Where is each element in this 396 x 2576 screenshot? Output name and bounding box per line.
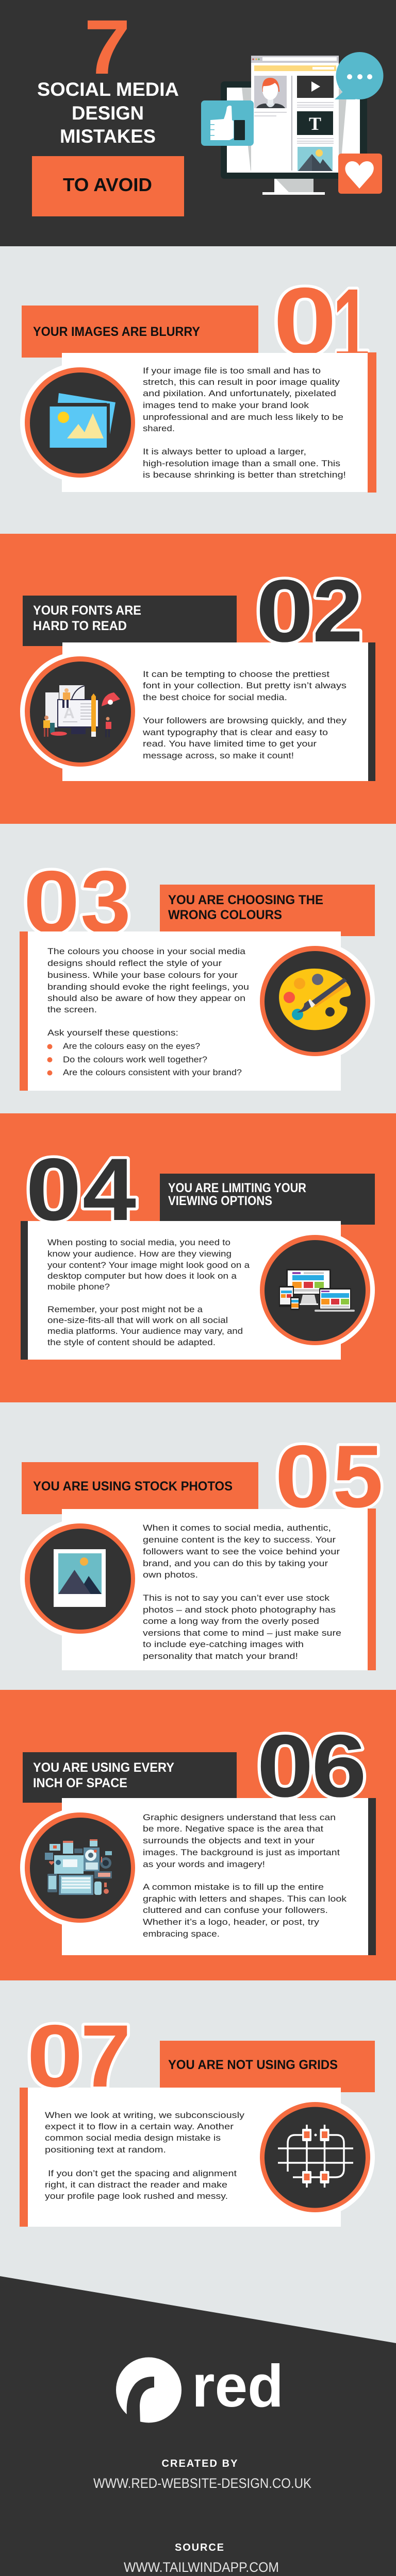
body text: font in your collection. But pretty isn’t always <box>143 681 346 690</box>
icon: speech bubble <box>335 52 384 99</box>
body text <box>143 1523 341 1661</box>
body text: images. The background is just as important <box>143 1848 340 1857</box>
body text: photos – and stock photo photography has <box>143 1605 336 1615</box>
body text: to include eye-catching images with <box>143 1640 304 1649</box>
heading bar: YOU ARE LIMITING YOUR <box>168 1181 306 1195</box>
heading bar: VIEWING OPTIONS <box>168 1194 272 1208</box>
body text: This is not to say you can’t ever use stock <box>143 1594 330 1603</box>
body text: desktop computer but how does it look on a <box>47 1272 237 1281</box>
number 05: 0 <box>275 1427 331 1526</box>
icon: cluttered devices <box>20 1808 140 1927</box>
body text <box>143 366 346 480</box>
bullet list: Are the colours consistent with your brand? <box>63 1068 242 1077</box>
panel: mistake 01 <box>0 246 396 534</box>
panel: header <box>0 0 396 246</box>
body text: surrounds the objects and text in your <box>143 1836 315 1845</box>
heading bar: YOU ARE NOT USING GRIDS <box>168 2058 338 2072</box>
heading bar: INCH OF SPACE <box>33 1776 127 1790</box>
icon: grid <box>255 2097 375 2217</box>
heading bar <box>23 596 237 646</box>
heading bar: YOU ARE USING EVERY <box>33 1760 174 1775</box>
text card <box>21 1221 341 1360</box>
number 01 <box>273 267 370 385</box>
text card <box>62 642 375 781</box>
body text: shared. <box>143 424 175 433</box>
number 04: 0 <box>26 1140 81 1239</box>
body text: right, it can distract the reader and make <box>45 2180 227 2190</box>
body text: be more. Negative space is the area that <box>143 1824 323 1834</box>
text: source: WWW.TAILWINDAPP.COM <box>124 2560 279 2575</box>
title box: to avoid <box>32 156 184 216</box>
body text: message across, so make it count! <box>143 751 294 760</box>
title: social media design mistakes: SOCIAL MEDIA <box>37 79 179 100</box>
text: created by: CREATED BY <box>162 2458 238 2469</box>
body text: personality that match your brand! <box>143 1652 298 1661</box>
heading bar <box>160 1174 375 1225</box>
body text: mobile phone? <box>47 1282 110 1292</box>
text card <box>20 931 341 1091</box>
heading bar <box>160 885 375 936</box>
number 05 <box>275 1427 383 1526</box>
illustration: monitor with social media page: T <box>309 113 321 134</box>
icon: thumbs up <box>201 100 254 146</box>
number 06: 0 <box>257 1717 314 1816</box>
body text: When it comes to social media, authentic, <box>143 1523 331 1533</box>
number 01: 1 <box>333 267 370 385</box>
number 05: 5 <box>333 1427 383 1526</box>
body text: own photos. <box>143 1570 198 1580</box>
body text: graphic with letters and shapes. This can look <box>143 1894 347 1904</box>
number 02 <box>256 562 363 660</box>
heading bar: YOUR FONTS ARE <box>33 603 141 618</box>
body text: is because shrinking is better than stretching! <box>143 470 346 480</box>
number 04 <box>26 1140 136 1239</box>
body text: cluttered and can confuse your followers. <box>143 1906 328 1915</box>
number 02: 2 <box>312 562 363 660</box>
body text: genuine content is the key to success. Your <box>143 1535 336 1545</box>
logo: red: red <box>192 2352 284 2419</box>
heading bar <box>23 1752 237 1803</box>
body text <box>142 670 347 760</box>
body text: When posting to social media, you need to <box>47 1238 230 1247</box>
body text: designs should reflect the style of your <box>47 959 222 968</box>
body text: followers want to see the voice behind your <box>143 1547 340 1556</box>
heading bar <box>22 1462 258 1514</box>
body text: If your image file is too small and has to <box>143 366 321 376</box>
title: social media design mistakes <box>37 79 179 147</box>
body text: A common mistake is to fill up the entire <box>143 1883 324 1892</box>
number 07: 7 <box>80 2007 131 2106</box>
illustration: monitor with social media page <box>201 52 384 195</box>
panel: mistake 04 <box>0 1113 396 1402</box>
body text: Remember, your post might not be a <box>47 1305 203 1314</box>
icon: photos <box>20 363 140 482</box>
body text: If you don’t get the spacing and alignment <box>48 2169 237 2178</box>
body text: common social media design mistake is <box>45 2133 221 2143</box>
number 03 <box>23 853 131 952</box>
text card <box>20 2088 341 2227</box>
body text: your profile page look rushed and messy. <box>45 2192 228 2201</box>
heading bar: YOU ARE USING STOCK PHOTOS <box>33 1479 233 1494</box>
heading bar <box>160 2041 375 2092</box>
panel: footer credits <box>0 2276 396 2576</box>
bullet list: Do the colours work well together? <box>63 1055 207 1064</box>
panel: mistake 05 <box>0 1402 396 1690</box>
icon: paint palette <box>255 941 375 1061</box>
icon: typography workspace <box>20 652 140 771</box>
body text: When we look at writing, we subconsciously <box>45 2111 245 2120</box>
body text: and pixilation. And unfortunately, pixelated <box>143 389 336 398</box>
body text: the best choice for social media. <box>143 693 287 702</box>
body text: the screen. <box>47 1005 97 1014</box>
panel: mistake 03 <box>0 824 396 1113</box>
text card <box>62 1509 376 1670</box>
body text: Graphic designers understand that less can <box>143 1813 336 1822</box>
body text: positioning text at random. <box>45 2145 166 2155</box>
panel: mistake 02 <box>0 534 396 824</box>
body text: should also be aware of how they appear on <box>47 994 245 1003</box>
text card <box>62 352 376 493</box>
body text: Your followers are browsing quickly, and they <box>143 716 347 725</box>
body text: one-size-fits-all that will work on all social <box>47 1316 228 1325</box>
body text: It can be tempting to choose the prettiest <box>143 670 329 679</box>
icon: typography workspace: A <box>63 705 75 722</box>
title: social media design mistakes: DESIGN <box>72 103 144 124</box>
bullet list <box>47 1042 242 1077</box>
body text <box>45 2111 245 2201</box>
bullet list: Are the colours easy on the eyes? <box>63 1042 200 1051</box>
icon: responsive devices <box>255 1230 375 1350</box>
text: source <box>124 2542 279 2575</box>
text: created by <box>93 2458 311 2491</box>
body text: the style of content should be adapted. <box>47 1338 216 1347</box>
heading bar: YOU ARE CHOOSING THE <box>168 893 323 907</box>
heading bar: WRONG COLOURS <box>168 908 282 922</box>
number 06: 6 <box>311 1717 367 1816</box>
body text: as your words and imagery! <box>143 1860 265 1869</box>
number 03: 3 <box>80 853 131 952</box>
body text <box>143 1813 347 1939</box>
number 06 <box>257 1717 367 1816</box>
body text: stretch, this can result in poor image quality <box>143 378 340 387</box>
body text: Ask yourself these questions: <box>47 1028 178 1038</box>
body text <box>47 947 249 1038</box>
number 03: 0 <box>23 853 80 952</box>
number 07: 0 <box>27 2007 83 2106</box>
body text: read. You have limited time to get your <box>143 739 317 749</box>
heading bar <box>22 306 258 358</box>
text: created by: WWW.RED-WEBSITE-DESIGN.CO.UK <box>93 2476 311 2491</box>
panel: mistake 06 <box>0 1690 396 1980</box>
body text: come a long way from the overly posed <box>143 1617 319 1626</box>
body text: want typography that is clear and easy to <box>142 728 328 737</box>
body text: brand, and you can do this by taking your <box>143 1559 328 1568</box>
body text: It is always better to upload a larger, <box>143 447 306 456</box>
number 07 <box>27 2007 131 2106</box>
body text: embracing space. <box>143 1929 220 1939</box>
panel: mistake 07 <box>0 1980 396 2351</box>
title: social media design mistakes: MISTAKES <box>60 126 156 147</box>
body text: business. While your base colours for your <box>47 971 238 980</box>
body text: unprofessional and are much less likely to be <box>143 413 343 422</box>
logo: red <box>116 2352 284 2424</box>
text: source: SOURCE <box>175 2542 224 2553</box>
body text: The colours you choose in your social media <box>47 947 246 956</box>
body text: media platforms. Your audience may vary, and <box>47 1327 243 1336</box>
body text: expect it to flow in a certain way. Another <box>45 2122 234 2131</box>
body text: versions that come to mind – just make sure <box>143 1629 341 1638</box>
body text: Whether it’s a logo, header, or post, try <box>143 1918 320 1927</box>
icon: heart <box>338 154 382 194</box>
title box: to avoid: TO AVOID <box>63 174 152 195</box>
title: number 7: 7 <box>84 4 130 90</box>
heading bar: YOUR IMAGES ARE BLURRY <box>33 325 200 339</box>
text card <box>62 1798 376 1955</box>
body text: your content? Your image might look good on a <box>47 1261 250 1270</box>
number 04: 4 <box>82 1140 136 1239</box>
icon: polaroid photo <box>20 1519 140 1638</box>
number 01: 0 <box>273 268 337 375</box>
body text <box>47 1238 250 1347</box>
number 02: 0 <box>256 562 314 660</box>
body text: images tend to make your brand look <box>143 401 309 410</box>
body text: branding should evoke the right feelings, you <box>47 982 249 992</box>
body text: know your audience. How are they viewing <box>47 1249 232 1259</box>
body text: high-resolution image than a small one. This <box>143 459 340 468</box>
heading bar: HARD TO READ <box>33 619 127 633</box>
